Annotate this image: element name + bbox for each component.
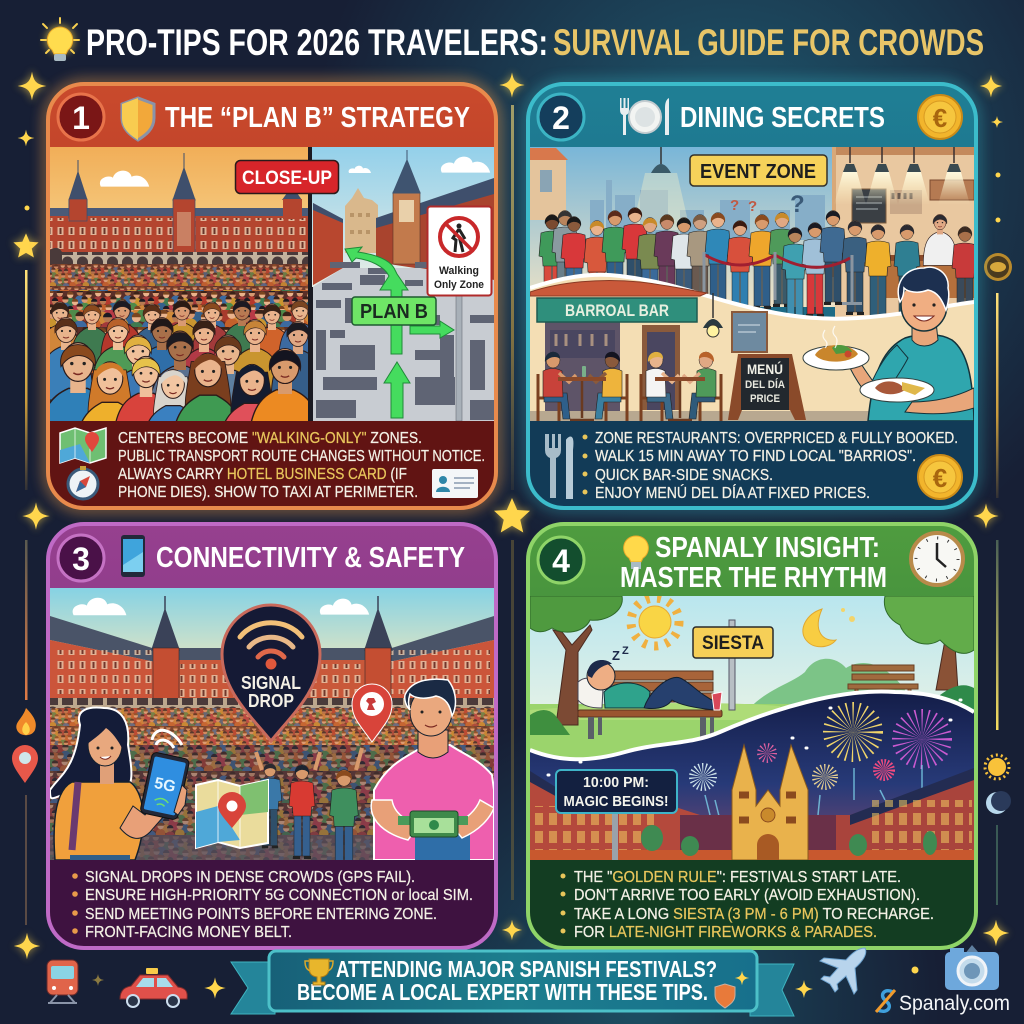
icon: euro coin small <box>918 455 962 499</box>
walking only zone sign: Only Zone <box>434 279 484 291</box>
panel 2 number badge: 2 <box>552 100 570 136</box>
icon: euro coin small: € <box>933 463 947 493</box>
confused question marks: ? <box>730 197 739 214</box>
panel 4 heading: SPANALY INSIGHT: <box>655 532 880 564</box>
panel 1 right scene: plan b route <box>312 147 494 421</box>
small trees <box>641 825 937 856</box>
panel 4 heading: MASTER THE RHYTHM <box>620 562 887 594</box>
panel 4 text footer: THE "GOLDEN RULE": FESTIVALS START LATE. <box>574 869 901 886</box>
title: PRO-TIPS FOR 2026 TRAVELERS: <box>86 22 548 63</box>
icon: plate and cutlery <box>620 98 669 135</box>
panel 4 text footer: DON'T ARRIVE TOO EARLY (AVOID EXHAUSTION). <box>574 887 920 904</box>
panel 3 text footer: SEND MEETING POINTS BEFORE ENTERING ZONE. <box>85 906 437 923</box>
panel 3 mid crowd <box>254 748 392 860</box>
siesta sign <box>693 620 773 710</box>
icon: map pin <box>12 745 38 783</box>
panel 3 text footer: SIGNAL DROPS IN DENSE CROWDS (GPS FAIL). <box>85 869 415 886</box>
menu del dia board: DEL DÍA <box>745 378 785 391</box>
panel 3 text footer: ENSURE HIGH-PRIORITY 5G CONNECTION or local SIM. <box>85 887 473 904</box>
panel 3 number badge <box>58 535 104 581</box>
icon: smartphone <box>121 535 145 577</box>
sleeping man on bench <box>578 645 722 739</box>
sun <box>631 598 679 646</box>
title <box>86 22 984 63</box>
queue of people <box>539 208 978 322</box>
panel 1 text footer: PUBLIC TRANSPORT ROUTE CHANGES WITHOUT NOTICE. <box>118 448 485 465</box>
signal drop pin: DROP <box>248 691 294 711</box>
panel 3 heading: CONNECTIVITY & SAFETY <box>156 542 465 574</box>
confused question marks: ? <box>790 191 805 218</box>
stanchions and rope <box>704 252 862 305</box>
confused question marks <box>730 195 804 212</box>
panel 1 number badge: 1 <box>72 100 90 136</box>
confused question marks: ? <box>748 198 757 215</box>
plaza buildings <box>530 776 735 860</box>
panel 1 heading: THE “PLAN B” STRATEGY <box>165 102 470 134</box>
bottom ribbon banner <box>231 951 794 1016</box>
panel 2 text footer: ZONE RESTAURANTS: OVERPRICED & FULLY BOOKED. <box>595 430 958 447</box>
spanaly logo and url: Spanaly.com <box>899 992 1010 1015</box>
menu del dia board: MENÚ <box>747 360 783 377</box>
signal drop pin <box>222 605 320 741</box>
man with money belt <box>371 679 494 860</box>
magic begins sign: MAGIC BEGINS! <box>564 793 668 810</box>
event zone sign: EVENT ZONE <box>700 161 816 183</box>
icon: fork and knife <box>545 434 572 498</box>
icon: light bulb <box>41 18 79 61</box>
panel 3 text footer: FRONT-FACING MONEY BELT. <box>85 924 292 941</box>
close-up sign <box>236 160 338 194</box>
panel 2 text footer <box>528 421 976 511</box>
panel 4: spanaly insight <box>528 524 976 952</box>
moon <box>803 608 855 647</box>
event zone sign <box>690 155 827 186</box>
cathedral <box>732 745 808 860</box>
icon: airplane <box>820 948 866 994</box>
panel 1 text footer: CENTERS BECOME "WALKING-ONLY" ZONES. <box>118 430 422 447</box>
plan b sign <box>352 297 436 325</box>
far bench <box>848 665 918 699</box>
magic begins sign <box>556 770 677 813</box>
icon: shield <box>122 98 154 140</box>
icon: sun <box>985 755 1009 779</box>
fireworks <box>696 717 937 820</box>
icon: medallion <box>984 253 1012 281</box>
smiling traveler with plates <box>803 267 974 421</box>
bottom ribbon banner: ATTENDING MAJOR SPANISH FESTIVALS? <box>336 956 717 982</box>
bottom transport icons <box>47 960 187 1007</box>
walking only zone sign <box>428 206 492 296</box>
icon: business card <box>432 469 478 498</box>
panel 2 number badge <box>538 94 584 140</box>
icon: flame <box>16 708 36 735</box>
panel 4 day and night scene <box>530 596 974 860</box>
panel 4 heading <box>620 532 887 594</box>
icon: map <box>60 428 106 463</box>
panel 4 number badge: 4 <box>552 543 570 579</box>
arrows <box>345 247 454 418</box>
panel 4 number badge <box>538 537 584 583</box>
woman with 5g phone <box>50 708 190 861</box>
bottom ribbon banner: BECOME A LOCAL EXPERT WITH THESE TIPS. <box>297 979 708 1005</box>
icon: clock <box>911 533 963 585</box>
small pin <box>352 684 392 742</box>
icon: bulb <box>624 536 648 569</box>
panel 1 number badge <box>58 94 104 140</box>
signal drop pin: SIGNAL <box>241 673 301 693</box>
icon: compass <box>68 466 98 499</box>
cafe tables and diners <box>538 352 721 422</box>
menu del dia board: PRICE <box>750 393 780 405</box>
right tree <box>884 596 974 730</box>
hills and grass <box>530 658 905 758</box>
icon: train <box>47 960 78 1003</box>
icon: taxi <box>120 968 187 1007</box>
panel 2 scene <box>530 147 978 422</box>
panel 2 heading: DINING SECRETS <box>680 102 885 134</box>
panel 3: connectivity and safety <box>48 524 496 952</box>
close-up sign: CLOSE-UP <box>242 168 332 189</box>
lower local bar scene <box>530 267 974 422</box>
siesta sign: SIESTA <box>702 633 764 654</box>
panel 1: the plan b strategy <box>36 84 496 511</box>
walking only zone sign: Walking <box>439 265 479 277</box>
left tree <box>530 596 622 735</box>
icon: small shield <box>715 984 735 1008</box>
plan b sign: PLAN B <box>360 301 428 323</box>
panel 2 text footer: QUICK BAR-SIDE SNACKS. <box>595 467 773 484</box>
lower local bar scene: BARROAL BAR <box>565 301 669 320</box>
panel 1 text footer <box>48 421 496 511</box>
panel 3 scene <box>50 588 494 874</box>
icon: trophy <box>305 959 333 985</box>
pendant lamps <box>834 147 970 205</box>
panel 1 left scene: crowded plaza <box>50 147 308 421</box>
panel 1 text footer: ALWAYS CARRY HOTEL BUSINESS CARD (IF <box>118 466 407 483</box>
sleeping man on bench: Z <box>612 648 620 663</box>
panel 4 text footer: FOR LATE-NIGHT FIREWORKS & PARADES. <box>574 924 877 941</box>
panel 1 foreground crowd <box>50 300 308 421</box>
icon: moon <box>986 791 1011 814</box>
panel 1 text footer: PHONE DIES). SHOW TO TAXI AT PERIMETER. <box>118 484 418 501</box>
panel 2 text footer: WALK 15 MIN AWAY TO FIND LOCAL "BARRIOS". <box>595 448 916 465</box>
menu del dia board <box>728 354 806 420</box>
icon: camera <box>945 945 999 990</box>
icon: euro coin: € <box>933 103 947 133</box>
magic begins sign: 10:00 PM: <box>583 774 649 791</box>
icon: euro coin <box>918 95 962 139</box>
panel 3 number badge: 3 <box>72 541 90 577</box>
folded map <box>196 780 268 848</box>
panel 2 text footer: ENJOY MENÚ DEL DÍA AT FIXED PRICES. <box>595 483 870 502</box>
woman with 5g phone: 5G <box>153 775 177 796</box>
panel 2: dining secrets <box>528 84 978 511</box>
sleeping man on bench: Z <box>622 645 629 657</box>
panel 4 text footer <box>528 860 976 952</box>
panel 3 text footer <box>48 860 496 952</box>
panel 4 text footer: TAKE A LONG SIESTA (3 PM - 6 PM) TO RECHARGE. <box>574 906 934 923</box>
